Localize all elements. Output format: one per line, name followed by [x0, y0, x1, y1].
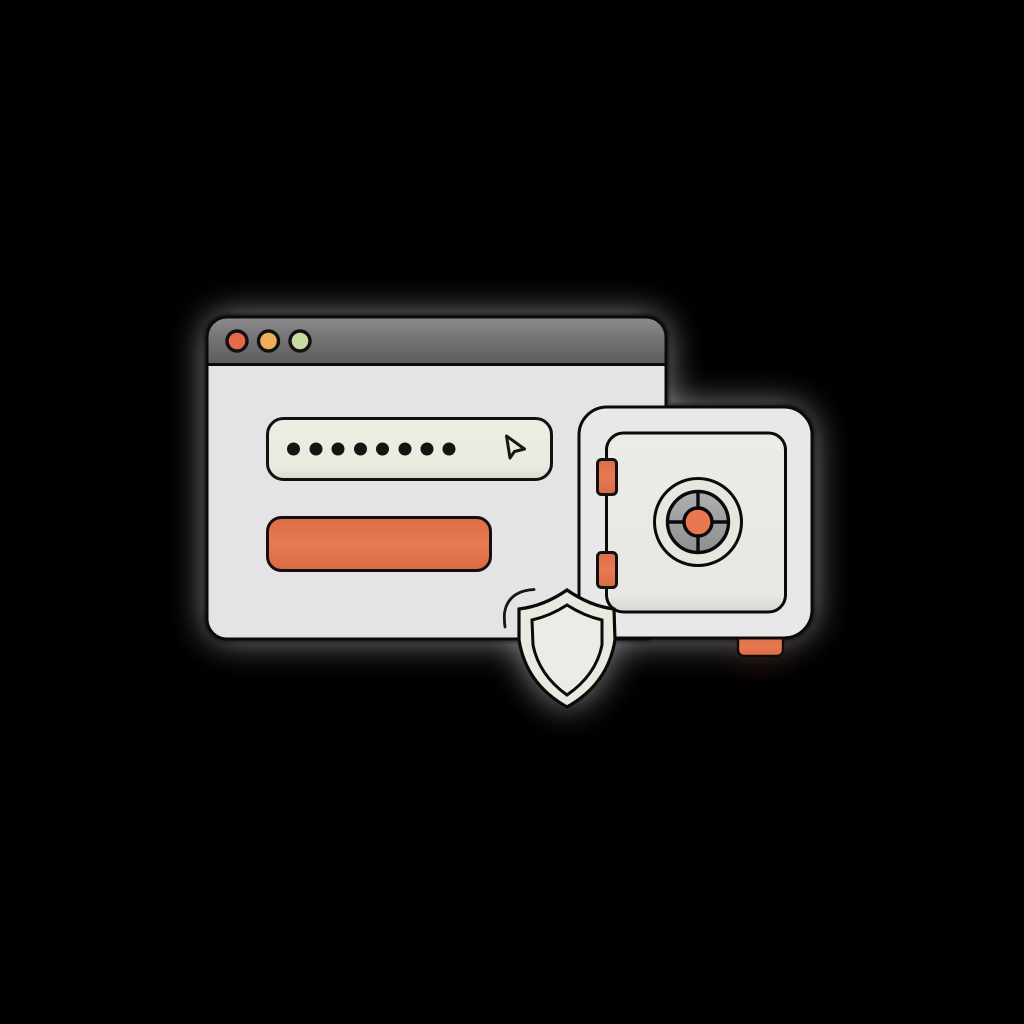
dial — [654, 478, 742, 566]
browser window — [207, 317, 666, 639]
dark contact halo — [206, 316, 813, 640]
safe body — [579, 407, 812, 638]
title bar — [207, 317, 666, 364]
orange foot glow — [735, 650, 785, 672]
outer white glow — [207, 317, 812, 707]
shield — [504, 590, 615, 707]
inner shield — [532, 605, 602, 695]
icon: cursor — [506, 436, 524, 458]
password field — [268, 418, 552, 480]
safe foot — [738, 636, 783, 656]
safe door — [606, 433, 786, 612]
password dots — [287, 442, 456, 456]
safe — [579, 407, 812, 656]
submit button — [268, 518, 490, 570]
hinges — [598, 460, 616, 588]
window control dots — [227, 331, 310, 351]
signal arc — [504, 590, 534, 627]
